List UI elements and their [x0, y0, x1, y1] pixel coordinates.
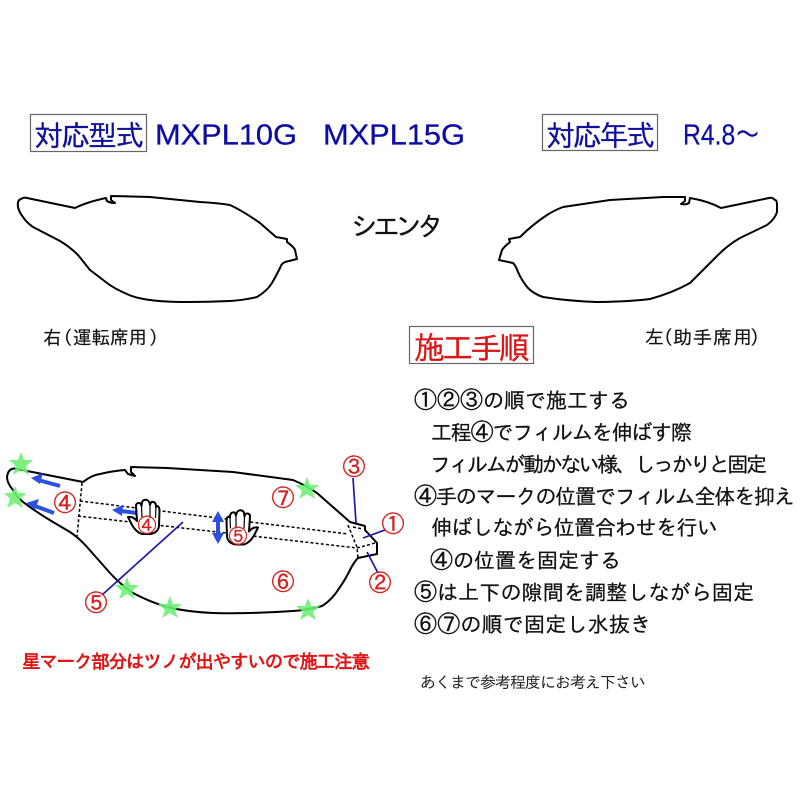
car name: シエンタ — [351, 213, 444, 240]
procedure steps: 工程④でフィルムを伸ばす際 — [431, 420, 692, 443]
arrow: upper stretch — [31, 473, 60, 486]
circled step numbers: ⑦ — [272, 486, 294, 509]
blue leader lines — [102, 478, 385, 595]
icon: hand 5 — [226, 510, 258, 546]
procedure steps: フィルムが動かない様、しっかりと固定 — [430, 454, 767, 475]
procedure heading: 施工手順 — [414, 332, 530, 363]
year value: R4.8〜 — [683, 120, 760, 152]
circled step numbers — [54, 455, 404, 614]
model codes: MXPL10G — [155, 120, 297, 152]
procedure steps: 伸ばしながら位置合わせを行い — [431, 517, 718, 538]
arrow: lower stretch — [26, 499, 54, 513]
dashed cut lines — [77, 483, 375, 559]
caption: right side: 右（運転席用） — [43, 328, 168, 347]
window outline: left side — [499, 197, 777, 302]
caption: left side: 左（助手席用） — [645, 327, 769, 347]
procedure steps: ④の位置を固定する — [430, 548, 621, 571]
model codes — [155, 120, 465, 152]
procedure steps — [414, 388, 795, 635]
procedure steps: ⑤は上下の隙間を調整しながら固定 — [414, 580, 754, 603]
label box: applicable model: 対応型式 — [34, 121, 144, 150]
icon: hand 5: ⑤ — [228, 526, 248, 546]
model codes: MXPL15G — [323, 120, 465, 152]
arrow: up and down — [212, 511, 224, 544]
procedure steps: ⑥⑦の順で固定し水抜き — [414, 612, 651, 635]
red warning: 星マーク部分はツノが出やすいので施工注意 — [22, 652, 370, 671]
label box: applicable year: 対応年式 — [546, 121, 655, 150]
circled step numbers: ② — [368, 571, 392, 594]
circled step numbers: ④ — [54, 491, 76, 514]
procedure steps: ④手のマークの位置でフィルム全体を抑え — [414, 484, 795, 507]
circled step numbers: ① — [382, 512, 404, 535]
diagram window outline — [7, 467, 377, 613]
arrow: from hand — [112, 505, 137, 516]
circled step numbers: ⑥ — [272, 570, 294, 593]
star markers — [4, 452, 320, 620]
icon: hand 4 — [128, 500, 160, 535]
icon: hand 4: ④ — [138, 515, 156, 535]
circled step numbers: ⑤ — [84, 591, 108, 614]
procedure diagram — [4, 452, 404, 620]
window outline: right side — [18, 196, 297, 302]
circled step numbers: ③ — [342, 455, 366, 478]
disclaimer note: あくまで参考程度にお考え下さい — [420, 674, 646, 690]
procedure steps: ①②③の順で施工する — [414, 388, 630, 411]
